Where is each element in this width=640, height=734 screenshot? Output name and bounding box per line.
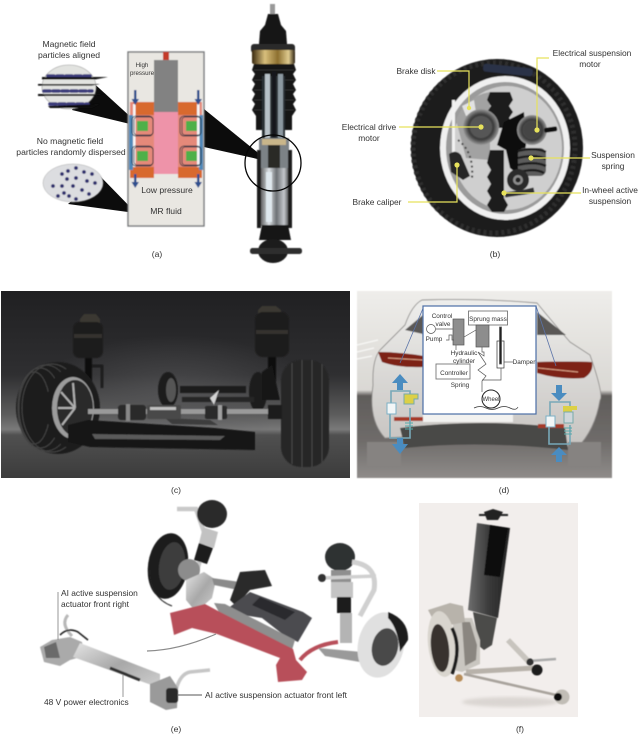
strut assembly [425, 509, 570, 704]
right tyre [281, 360, 329, 467]
inset: hydraulic schematic [423, 306, 536, 414]
label: Damper: Damper [513, 359, 536, 366]
lens: aligned particles [38, 65, 108, 109]
caption (e): (e) [171, 724, 181, 734]
leader: front left [178, 694, 202, 696]
chassis [16, 306, 329, 467]
label: Brake caliper: Brake caliper [353, 197, 402, 207]
label: 48 V power electronics: 48 V power electronics [44, 697, 129, 707]
caption (a): (a) [152, 249, 162, 259]
panel: (b) in-wheel active suspension [342, 48, 638, 259]
caption (b): (b) [490, 249, 500, 259]
label: No magnetic field particles randomly dispersed: particles randomly dispersed [16, 147, 126, 157]
label: Electrical suspension motor: motor [579, 59, 601, 69]
label: Spring: Spring [451, 382, 470, 389]
label: Low pressure: Low pressure [141, 185, 193, 195]
subframe [68, 420, 255, 450]
knuckle [186, 572, 216, 612]
control arms [466, 668, 534, 672]
leader dots [454, 106, 540, 196]
label: Electrical drive motor: Electrical drive [342, 122, 397, 132]
label: Electrical drive motor: motor [358, 133, 380, 143]
label: Magnetic field particles aligned: Magnetic field [42, 39, 96, 49]
upper bellows [487, 92, 513, 128]
label: High pressure: High [136, 62, 149, 69]
left upper arm [177, 509, 204, 575]
panel: (f) strut and motor photo [419, 503, 578, 734]
lower bellows [487, 150, 508, 212]
left actuator schematic [387, 374, 418, 454]
label: Hydraulic cylinder: Hydraulic [451, 350, 478, 357]
label: MR fluid: MR fluid [150, 206, 182, 216]
front axle assembly [144, 500, 410, 682]
right disc [352, 608, 410, 682]
lens: dispersed particles [43, 164, 103, 202]
right air spring [258, 306, 281, 314]
label: AI active suspension actuator front right: actuator front right [61, 599, 130, 609]
leader lines [399, 58, 590, 202]
callout wedge: aligned particles [72, 78, 134, 124]
label: In-wheel active suspension: In-wheel active [582, 185, 638, 195]
label: Wheel: Wheel [482, 397, 500, 403]
label: High pressure: pressure [130, 70, 155, 77]
magnified-area circle [245, 135, 301, 191]
left brake [144, 531, 192, 601]
label: Control valve: valve [436, 321, 451, 328]
MR damper cross-section diagram [128, 52, 204, 226]
panel: (a) magnetorheological damper [16, 4, 302, 263]
suspension spring [518, 148, 546, 176]
arrow down [392, 438, 408, 454]
caption (c): (c) [171, 485, 181, 495]
label: Pump: Pump [426, 336, 443, 343]
grey rack on top of red bar [214, 603, 295, 650]
control arm [230, 570, 272, 606]
black strut [497, 112, 526, 176]
electrical suspension motor [517, 115, 547, 145]
right air spring [325, 543, 355, 571]
far wheels [158, 372, 178, 408]
label: Brake disk: Brake disk [396, 66, 436, 76]
bottom arm [318, 648, 362, 662]
panel: (e) AI active suspension actuator [40, 500, 410, 734]
label: No magnetic field particles randomly dispersed: No magnetic field [37, 136, 103, 146]
label: Control valve: Control [432, 313, 452, 320]
arrow up [392, 374, 408, 390]
left air spring [197, 500, 227, 528]
background [1, 291, 350, 478]
inset leader lines [400, 306, 556, 366]
panel: (c) air suspension chassis photo [1, 291, 350, 495]
panel: (d) active suspension schematic on car [357, 291, 612, 495]
left air spring [80, 314, 100, 323]
arrow up [551, 447, 567, 462]
car background [357, 291, 612, 478]
exploded view line [147, 634, 216, 651]
gear [507, 169, 529, 191]
wheel photo [411, 59, 583, 237]
caption (f): (f) [516, 724, 524, 734]
callout wedge: damper section to shock absorber [204, 109, 262, 160]
top arm [322, 576, 376, 578]
shock absorber photo [250, 4, 302, 263]
left tyre [16, 362, 100, 454]
label: In-wheel active suspension: suspension [589, 196, 632, 206]
motor housing [453, 618, 480, 672]
label: Suspension spring: spring [602, 161, 625, 171]
label: Sprung mass: Sprung mass [469, 316, 507, 323]
label: AI active suspension actuator front left: AI active suspension actuator front left [205, 690, 348, 700]
electrical drive motor [463, 109, 499, 145]
shadow [462, 697, 558, 707]
dark plate [223, 592, 312, 642]
label: Controller: Controller [440, 370, 469, 377]
actuator [40, 615, 210, 710]
background [419, 503, 578, 717]
label: Suspension spring: Suspension [591, 150, 635, 160]
leader: 48 V power electronics [122, 675, 124, 697]
right actuator schematic [546, 385, 577, 462]
red actuator bar [170, 604, 307, 682]
label: Magnetic field particles aligned: particles aligned [38, 50, 100, 60]
label: AI active suspension actuator front right: AI active suspension [61, 588, 138, 598]
caption (d): (d) [499, 485, 509, 495]
steering link [212, 578, 240, 590]
brake caliper [449, 152, 470, 180]
drive shaft [88, 409, 278, 414]
arrow down [551, 385, 567, 401]
leader: front right [57, 592, 59, 640]
callout wedge: dispersed particles [68, 176, 136, 213]
label: Hydraulic cylinder: cylinder [453, 358, 476, 365]
label: Electrical suspension motor: Electrical suspension [553, 48, 632, 58]
